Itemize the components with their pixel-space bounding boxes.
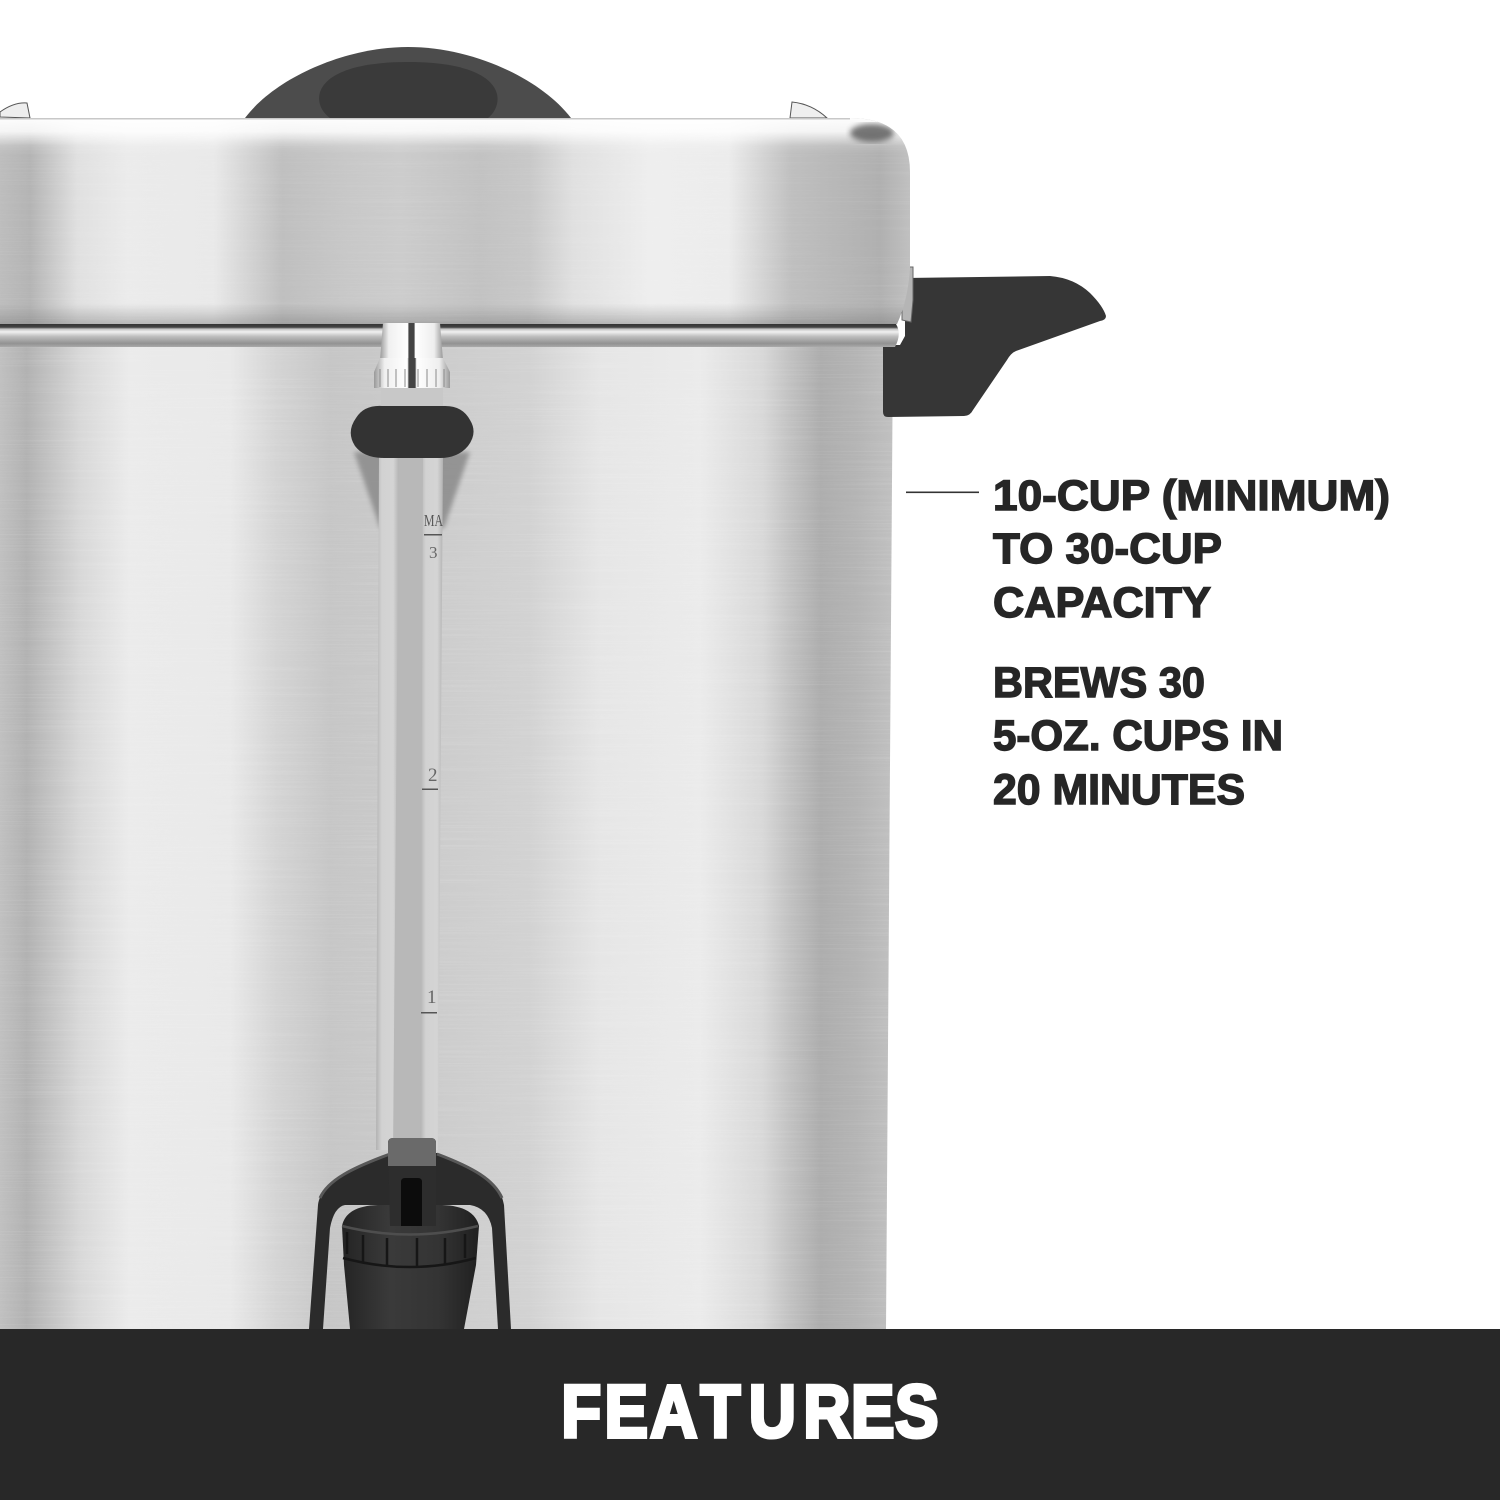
- bracket arch: [309, 1153, 511, 1329]
- side handle: [883, 267, 1106, 417]
- callout text: capacity: TO 30-CUP: [993, 525, 1222, 573]
- sight gauge: [351, 323, 474, 1150]
- tick 2: [422, 788, 438, 790]
- valve stem cap: [388, 1138, 436, 1166]
- knob finger recess: [319, 62, 498, 118]
- scale number 3: 3: [429, 543, 438, 562]
- handle mounting clip: [902, 267, 913, 322]
- callout text: capacity: 10-CUP (MINIMUM): [993, 472, 1390, 520]
- knurled collar: [374, 358, 450, 388]
- callout text: brew speed: 5-OZ. CUPS IN: [993, 712, 1283, 760]
- lid clip ear left: [0, 103, 30, 118]
- spigot knob body: [342, 1205, 479, 1329]
- chrome connector top: [380, 323, 443, 360]
- callout leader line: [906, 492, 979, 493]
- urn lid: [0, 117, 910, 324]
- gauge shadow: [354, 452, 470, 528]
- frosted neck: [381, 388, 443, 410]
- callout text: brew speed: BREWS 30: [993, 659, 1205, 707]
- scale number 1: 1: [427, 987, 436, 1008]
- tick max: [424, 534, 442, 536]
- footer title: FEATURES: [561, 1370, 938, 1453]
- tick 1: [421, 1012, 437, 1014]
- rubber grommet: [351, 406, 474, 458]
- scale MAX label: MA: [424, 511, 443, 530]
- bracket highlight: [320, 1154, 502, 1198]
- callout text: brew speed: [993, 659, 1283, 814]
- valve stem: [388, 1138, 436, 1226]
- valve slot: [401, 1178, 422, 1226]
- urn body: [0, 340, 893, 1329]
- right tube: [420, 455, 443, 1150]
- callout text: capacity: CAPACITY: [993, 579, 1211, 627]
- scale number 2: 2: [428, 765, 438, 786]
- gauge center gap: [393, 455, 424, 1150]
- spigot: [309, 1138, 511, 1329]
- footer bar: [0, 1329, 1500, 1500]
- rim band: [0, 324, 899, 347]
- callout text: brew speed: 20 MINUTES: [993, 766, 1245, 814]
- left tube: [376, 455, 399, 1150]
- lid clip ear right: [790, 102, 827, 118]
- callout text: capacity: [993, 472, 1390, 627]
- lid handle knob: [245, 47, 571, 118]
- knob rib band: [342, 1226, 478, 1268]
